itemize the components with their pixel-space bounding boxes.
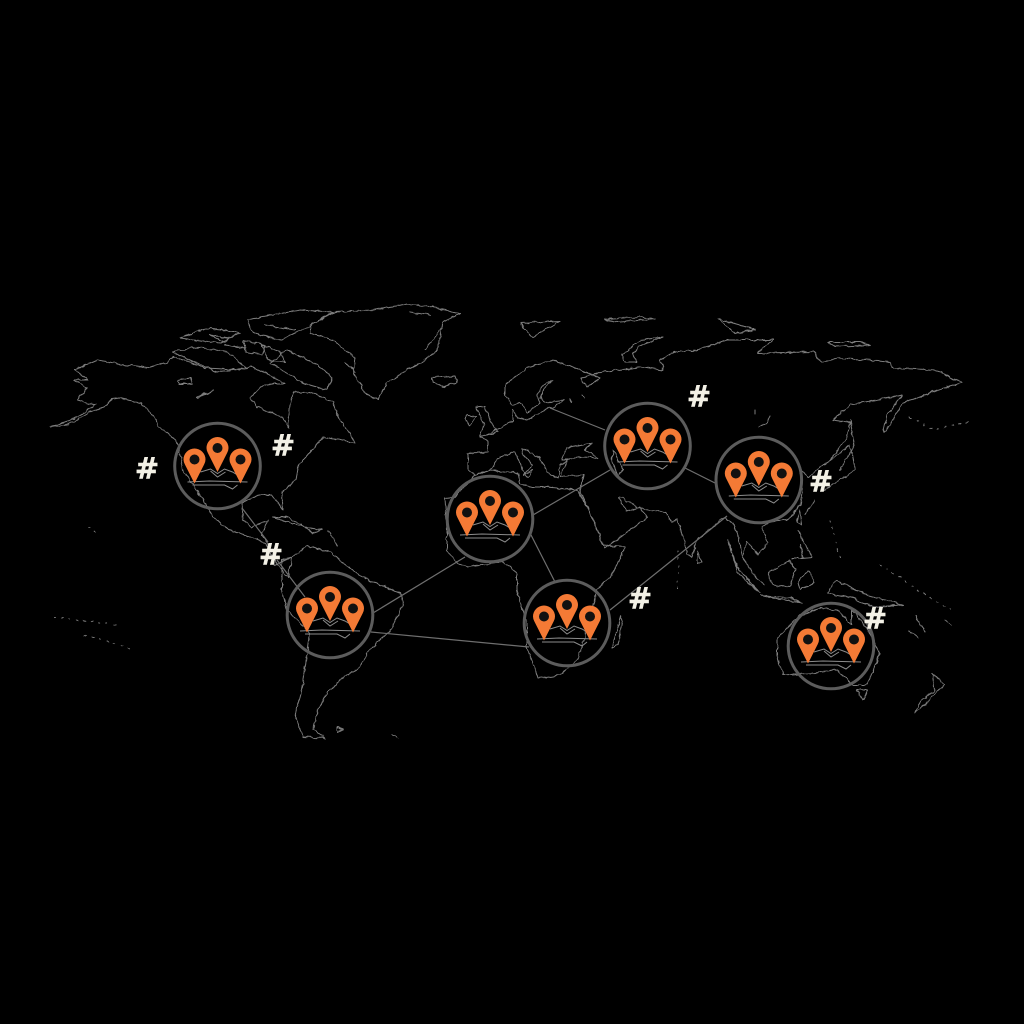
location cluster: Australia <box>788 603 874 689</box>
Russia north coast <box>505 340 962 585</box>
Canadian Arctic <box>173 347 247 372</box>
Iceland <box>432 376 457 387</box>
hash label: Coral Sea: # <box>863 602 887 636</box>
Madagascar <box>612 615 623 648</box>
Middle East and India <box>580 475 742 557</box>
location cluster: West Africa <box>447 476 533 562</box>
Sri Lanka <box>697 552 702 564</box>
Sakhalin and Japan <box>817 420 855 490</box>
location cluster: East Asia <box>716 437 802 523</box>
Island specks <box>54 418 970 650</box>
hash label: Pacific: # <box>135 452 159 486</box>
hash label: Great Lakes: # <box>271 428 295 462</box>
Caspian Sea <box>612 450 623 476</box>
Novaya Zemlya <box>622 337 663 362</box>
hash label: Central America: # <box>259 538 283 572</box>
Africa <box>445 470 625 678</box>
New Zealand <box>915 673 945 712</box>
Greenland <box>310 304 460 400</box>
hash label: Japan: # <box>809 464 833 498</box>
location cluster: North America <box>175 423 260 509</box>
hash label: Indian Ocean: # <box>628 582 652 616</box>
North America <box>50 357 355 578</box>
connection lines <box>242 408 727 647</box>
Scandinavia and Europe <box>468 380 598 478</box>
world map outline <box>50 304 970 738</box>
Cuba and Caribbean <box>273 517 322 533</box>
UK and Ireland <box>476 406 497 436</box>
Australia <box>777 608 880 685</box>
location cluster: Central Asia <box>605 403 690 489</box>
location cluster: Southern Africa <box>524 580 610 666</box>
hash label: Siberia: # <box>687 380 711 414</box>
South America <box>282 546 403 738</box>
Svalbard and Arctic islands <box>520 317 870 347</box>
Indonesia and Philippines <box>728 540 760 593</box>
location cluster: South America <box>287 572 373 658</box>
